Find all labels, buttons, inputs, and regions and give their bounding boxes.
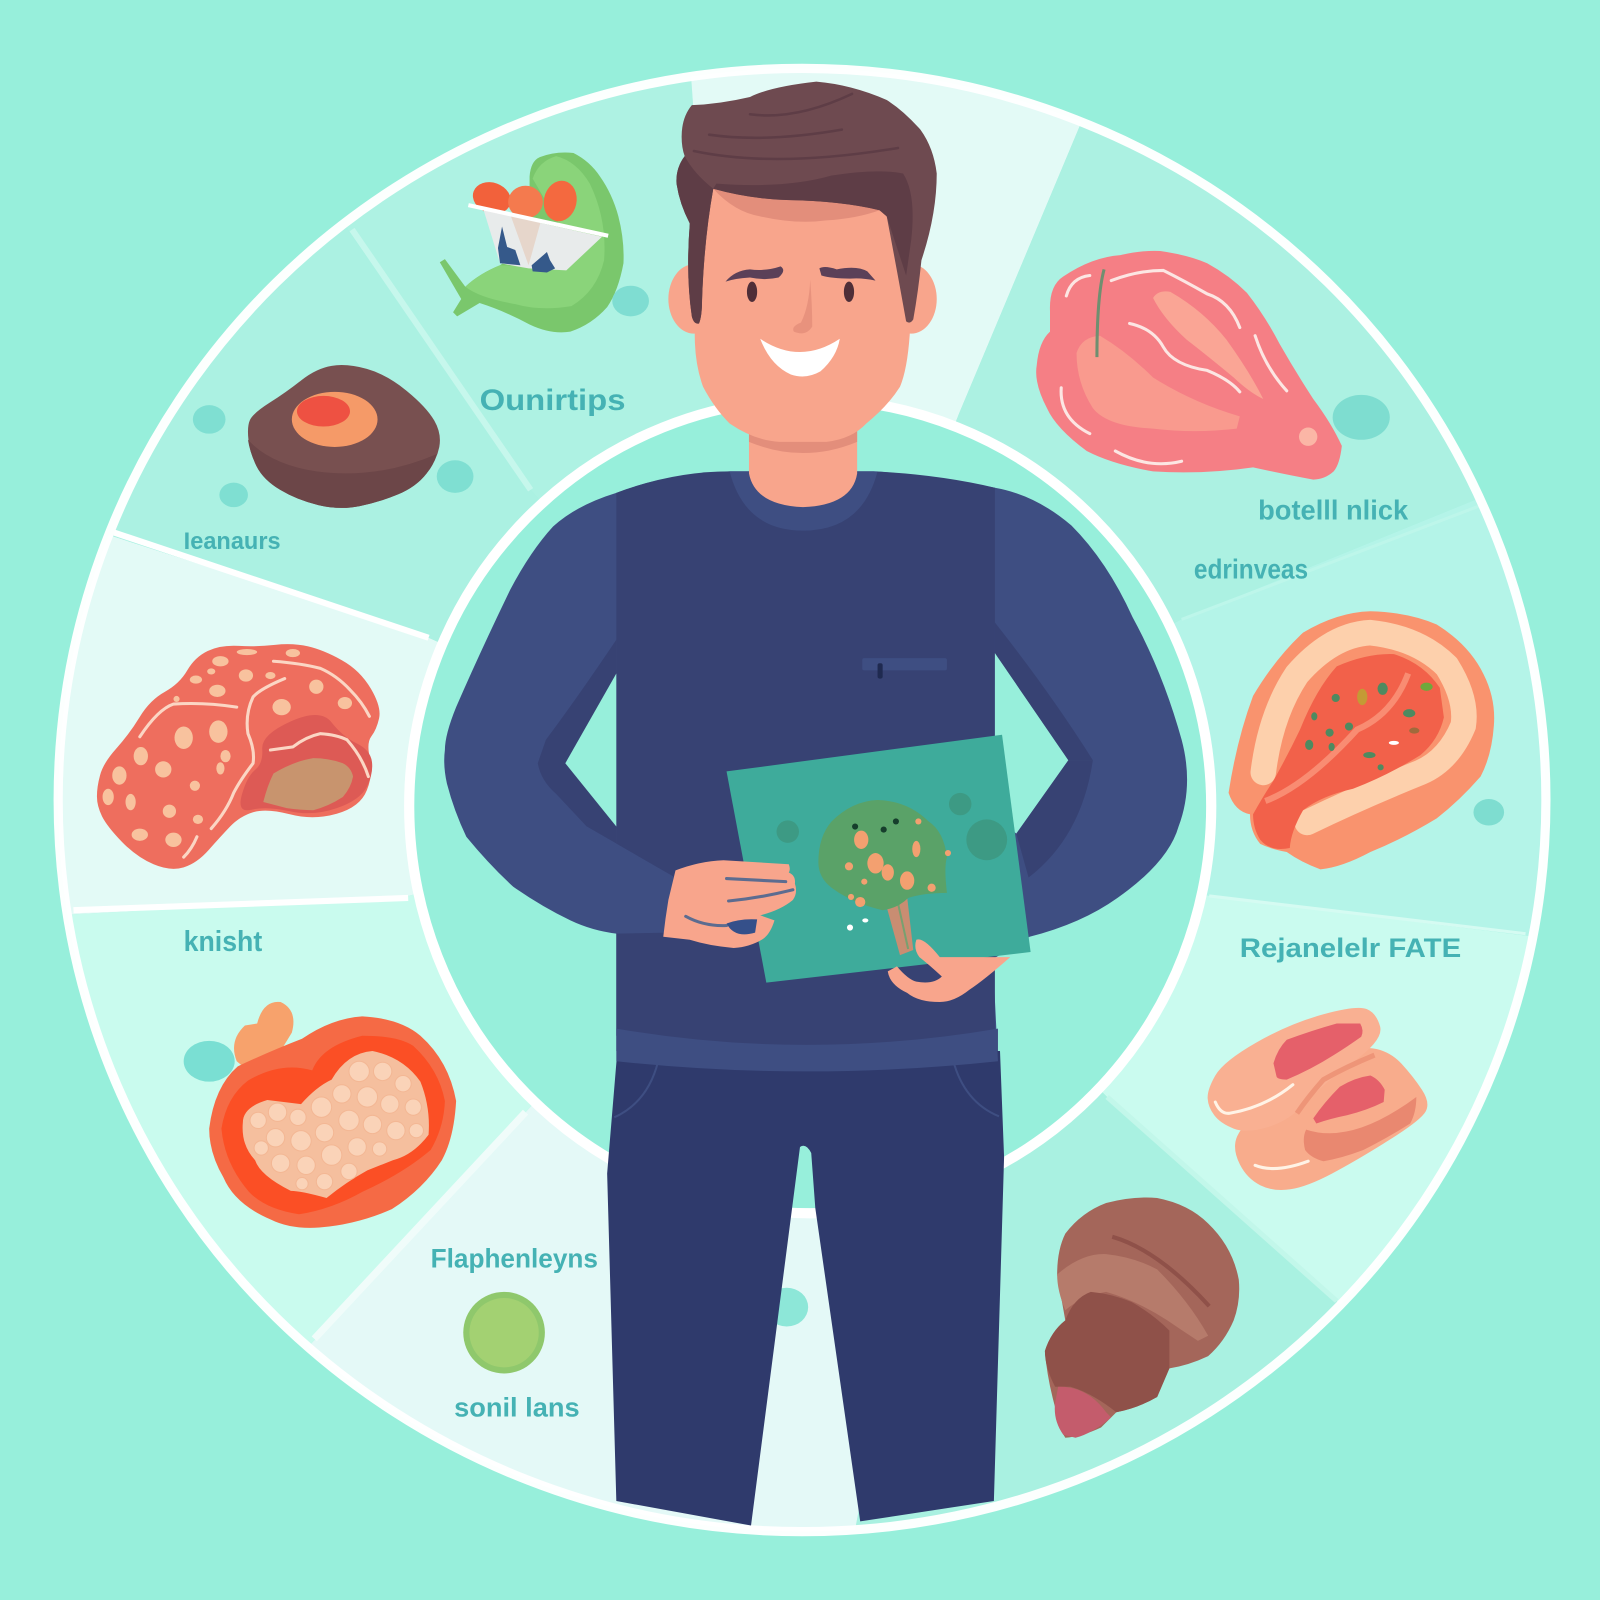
forehead shadow [713, 179, 880, 222]
chest pocket [862, 658, 947, 679]
icon: bubble near tomato [184, 1041, 235, 1082]
label: edrinveas: edrinveas [1194, 554, 1308, 585]
panel: sliced meat segment [1102, 896, 1528, 1302]
icon: spotted red meat [97, 644, 380, 869]
icon: sliced meat [1208, 1008, 1427, 1190]
card [727, 735, 1031, 983]
eyebrows [726, 266, 876, 282]
icon: bubble between legs [765, 1288, 808, 1327]
person [444, 82, 1187, 1526]
sweater [444, 471, 1187, 1071]
panel: patty segment [114, 228, 539, 642]
label: Ieanaurs: Ieanaurs [184, 528, 281, 555]
panel: pink meat segment [956, 126, 1475, 623]
panel: green circle segment [311, 1106, 858, 1527]
icon: bubble near pink meat [1333, 395, 1390, 440]
ears [668, 264, 937, 334]
label: botelll nlick: botelll nlick [1258, 494, 1409, 525]
tree illustration [818, 800, 951, 955]
hair [676, 82, 937, 324]
label: knisht: knisht [184, 926, 263, 958]
icon: salmon slice [1229, 611, 1494, 869]
face [692, 184, 910, 442]
icon: tomato with rice [209, 1002, 456, 1228]
icon: bubble near salmon [1473, 799, 1504, 826]
icon: salad bowl [440, 153, 624, 332]
panel: segment behind head [692, 73, 1080, 422]
panel: croissant segment [856, 1092, 1337, 1525]
inner circle [409, 399, 1211, 1213]
label: Ounirtips: Ounirtips [480, 384, 626, 417]
panel: tomato segment [72, 894, 532, 1344]
icon: bubbles near patty [193, 405, 473, 507]
smile [760, 339, 840, 376]
neck [749, 429, 857, 507]
label: sonil lans: sonil lans [454, 1392, 580, 1422]
pants [607, 1051, 1004, 1526]
icon: green circle [463, 1292, 545, 1373]
icon: brown patty [248, 365, 440, 508]
panel: salmon segment [1174, 500, 1542, 936]
right hand [888, 939, 1010, 1002]
panel: salad segment [346, 81, 714, 499]
nose [793, 280, 812, 333]
icon: pink meat [1036, 251, 1342, 480]
left hand [663, 860, 796, 948]
icon: croissant [1045, 1198, 1239, 1438]
hair shading [676, 94, 913, 324]
label: Flaphenleyns: Flaphenleyns [431, 1243, 598, 1273]
icon: bubble near salad [612, 286, 649, 316]
card spots [777, 793, 1007, 860]
panel: spotted meat segment [62, 536, 438, 914]
label: Rejanelelr FATE: Rejanelelr FATE [1240, 933, 1461, 963]
eyes [747, 282, 854, 302]
